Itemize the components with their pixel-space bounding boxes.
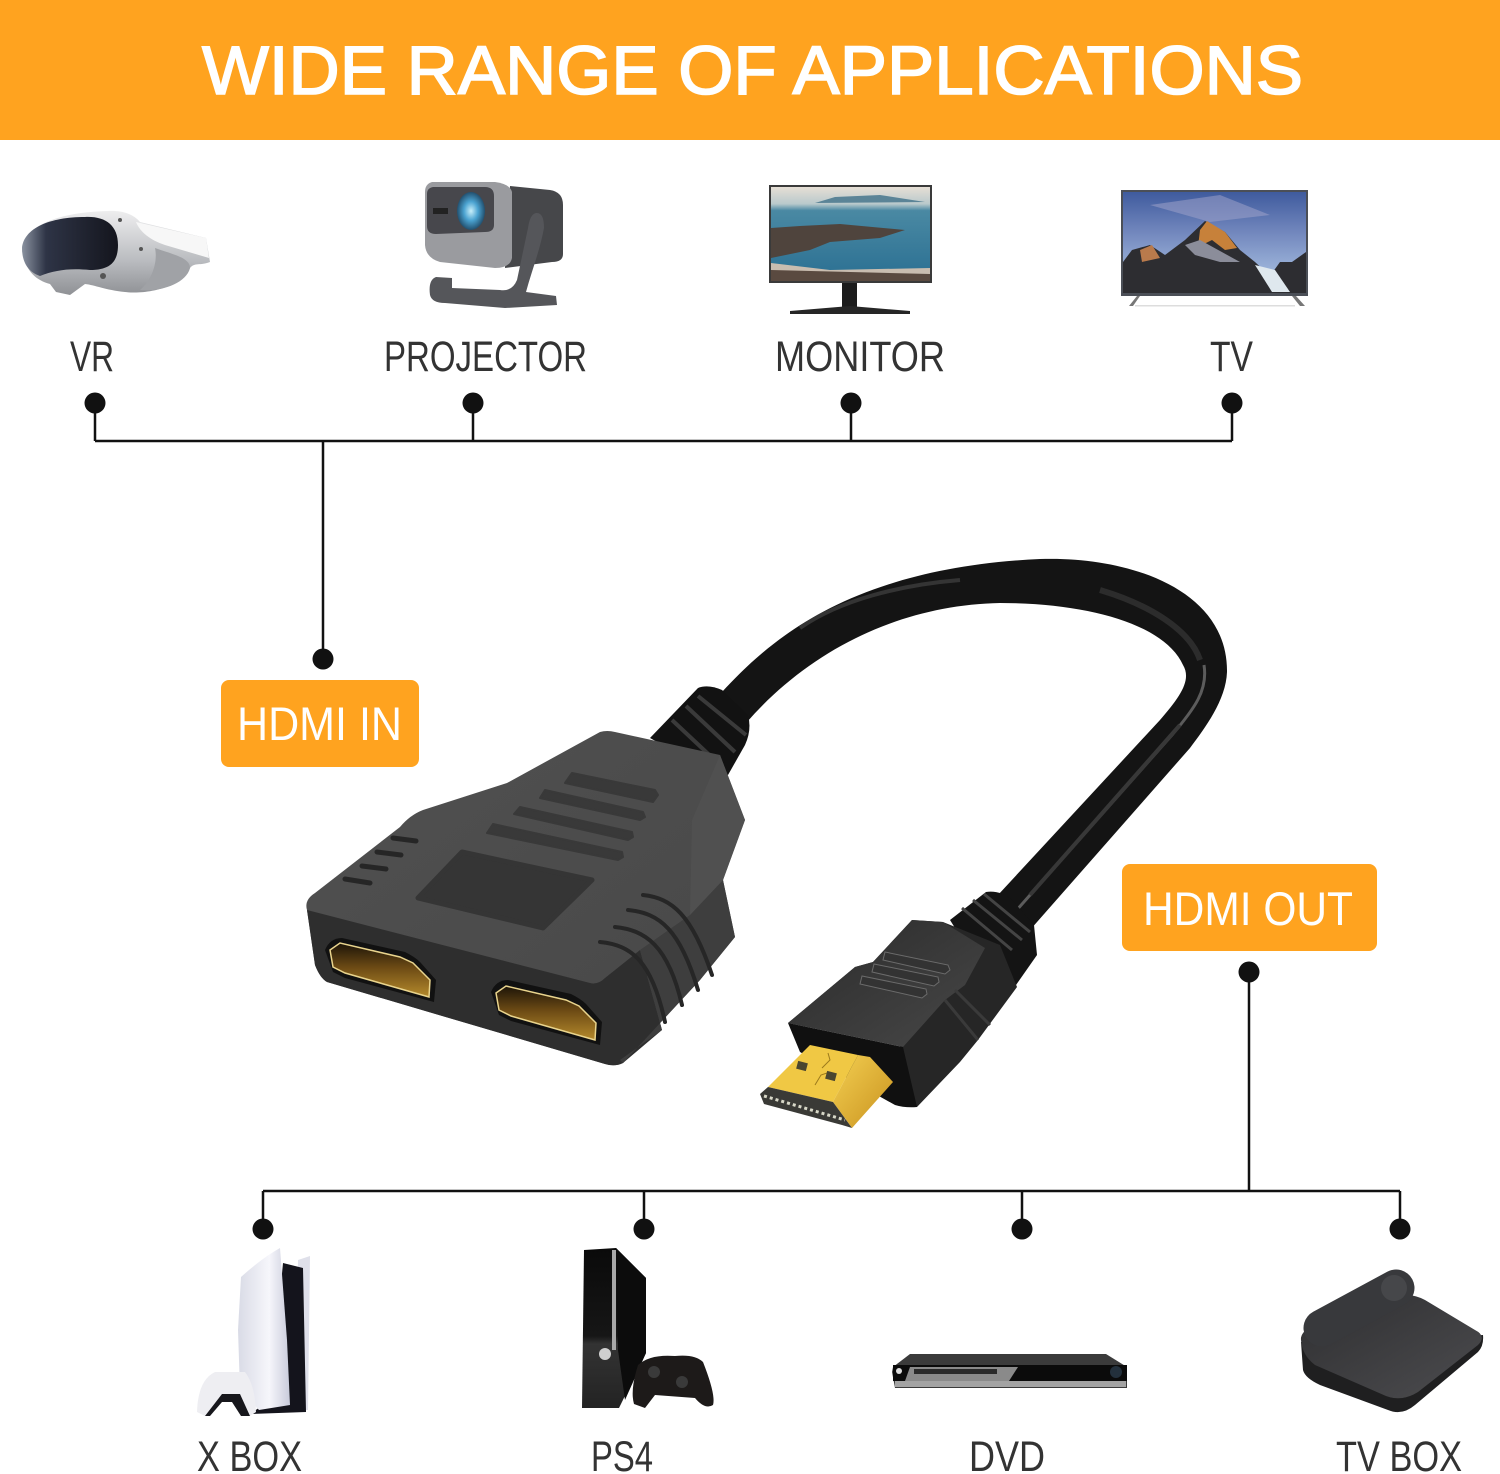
icon: TV box with remote [1301,1275,1483,1412]
icon: monitor [769,185,932,314]
connector: HDMI OUT to bottom device bus [252,962,1410,1240]
label: TV: TV [1210,333,1253,381]
icon: game console with controller [197,1248,310,1416]
callout: HDMI IN [221,680,419,767]
label: MONITOR: MONITOR [775,333,945,381]
gold plug tip [760,1045,893,1128]
cable [722,559,1227,930]
HDMI plug body [788,920,1017,1107]
callout: HDMI IN: HDMI IN [237,697,402,750]
icon: TV [1121,190,1308,306]
top face grooves [487,773,658,860]
icon: game console black with controller [582,1248,714,1408]
icon: projector [425,182,563,308]
connector: top device bus to HDMI IN [84,392,1242,670]
title: WIDE RANGE OF APPLICATIONS [202,32,1303,109]
splitter front face [307,910,662,1065]
splitter strain relief [650,686,749,775]
title banner [0,0,1500,140]
HDMI female port left [325,938,436,1002]
label recess [418,852,592,928]
label: VR: VR [70,333,114,381]
icon: VR headset [22,211,210,295]
splitter body [306,731,745,1065]
callout: HDMI OUT [1122,864,1377,951]
callout: HDMI OUT: HDMI OUT [1143,882,1353,935]
HDMI splitter cable [306,559,1227,1128]
icon: DVD player [892,1354,1127,1388]
side grip ticks [345,838,712,1022]
HDMI female port right [491,980,602,1045]
label: PROJECTOR: PROJECTOR [384,333,587,381]
plug strain relief [950,892,1037,985]
